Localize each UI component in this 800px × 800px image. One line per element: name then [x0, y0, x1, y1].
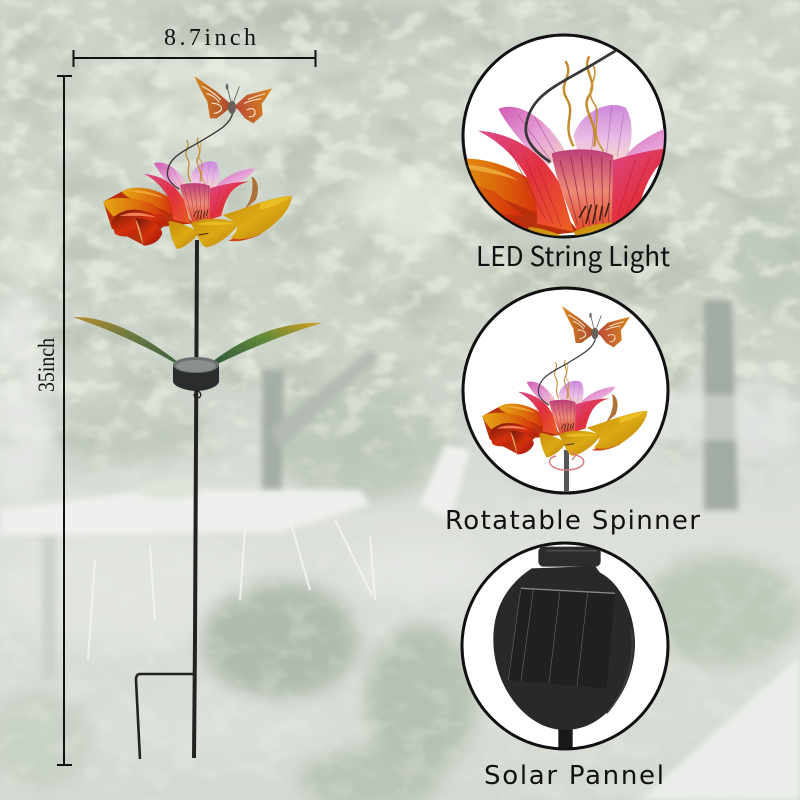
spinner stem: [564, 450, 569, 492]
rotation arrow: [550, 452, 584, 470]
width dimension line: [73, 25, 316, 67]
stem: [194, 240, 197, 758]
product: flower garden stake: [73, 76, 322, 759]
flower: [482, 306, 647, 457]
panel: LED string light: [462, 34, 670, 273]
caption: Solar Pannel: [484, 761, 664, 791]
leaf left: [73, 317, 190, 372]
flower and butterfly: [103, 76, 292, 249]
flower close-up: [466, 50, 664, 236]
height label: 35inch: [34, 338, 59, 392]
width label: 8.7inch: [164, 25, 256, 51]
panel: rotatable spinner: [445, 288, 700, 536]
stake fork: [136, 674, 194, 759]
leaf right: [199, 323, 322, 373]
height dimension line: [34, 76, 72, 765]
caption: Rotatable Spinner: [445, 506, 700, 536]
caption: LED String Light: [476, 235, 670, 274]
solar unit: [493, 547, 635, 750]
solar light: [173, 357, 219, 398]
panel: solar panel: [462, 543, 668, 791]
